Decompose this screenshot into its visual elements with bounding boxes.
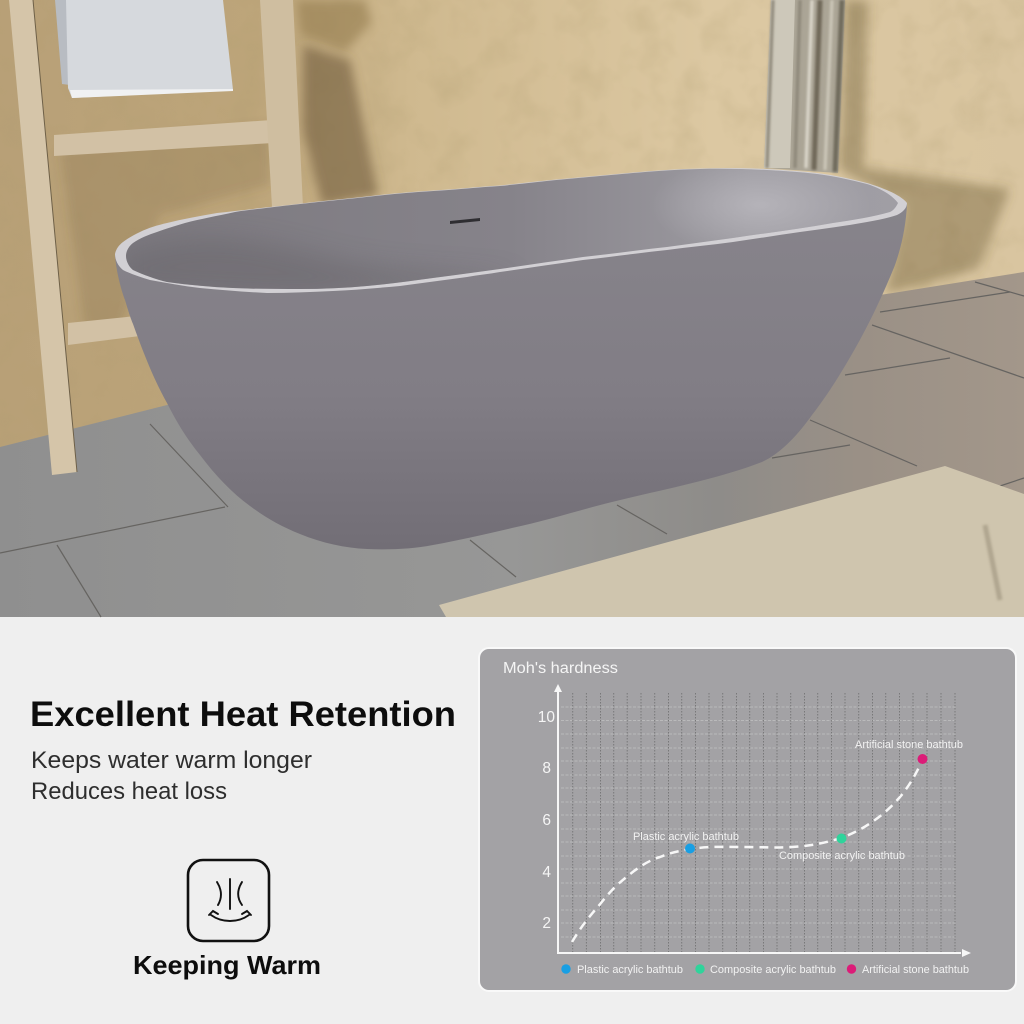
ladder and beam shadows — [60, 0, 1010, 330]
data labels: Plastic acrylic bathtub — [633, 831, 739, 843]
y axis labels: 4 — [542, 864, 551, 881]
y axis labels: 2 — [542, 915, 551, 932]
data labels — [633, 739, 963, 862]
product photo: grey freestanding bathtub — [0, 0, 1024, 617]
ladder right rail — [260, 0, 303, 207]
chart panel: Moh's hardness — [479, 648, 1016, 991]
y axis labels: 8 — [542, 760, 551, 777]
weathered wooden post — [764, 0, 845, 173]
grid — [561, 693, 957, 953]
ladder — [9, 0, 303, 475]
subheading lines: Reduces heat loss — [31, 778, 227, 805]
y axis labels — [538, 709, 555, 932]
wall stain — [296, 0, 372, 52]
data point: composite acrylic — [836, 834, 846, 844]
icon: keeping warm — [188, 860, 269, 941]
data labels: Composite acrylic bathtub — [779, 850, 905, 862]
tub white rim — [115, 168, 907, 293]
data labels: Artificial stone bathtub — [855, 739, 963, 751]
legend — [561, 964, 969, 976]
tub interior basin — [126, 168, 898, 289]
rug — [439, 466, 1024, 617]
axes — [554, 684, 971, 957]
y axis labels: 10 — [538, 709, 555, 726]
dashed curve — [572, 759, 923, 942]
panel background — [479, 648, 1016, 991]
ladder left rail — [9, 0, 77, 475]
wall — [0, 0, 1024, 460]
subheading lines — [31, 747, 312, 805]
legend: Plastic acrylic bathtub — [577, 964, 683, 976]
floor tile joints — [0, 282, 1024, 617]
interior shade — [126, 242, 457, 289]
heading: Excellent Heat Retention — [30, 695, 456, 734]
towel — [55, 0, 233, 98]
data point: artificial stone — [918, 754, 928, 764]
y axis labels: 6 — [542, 812, 551, 829]
rug marks — [985, 525, 1000, 600]
data point: plastic acrylic — [685, 844, 695, 854]
floor — [0, 272, 1024, 617]
tub overflow drain — [450, 218, 480, 224]
bathtub — [110, 155, 910, 549]
chart title: Moh's hardness — [503, 660, 618, 677]
tub outer body — [115, 204, 907, 549]
icon caption: Keeping Warm — [133, 950, 321, 980]
ladder rungs — [54, 120, 273, 156]
legend: Composite acrylic bathtub — [710, 964, 836, 976]
legend: Artificial stone bathtub — [862, 964, 969, 976]
interior highlight — [680, 172, 830, 236]
subheading lines: Keeps water warm longer — [31, 747, 312, 774]
